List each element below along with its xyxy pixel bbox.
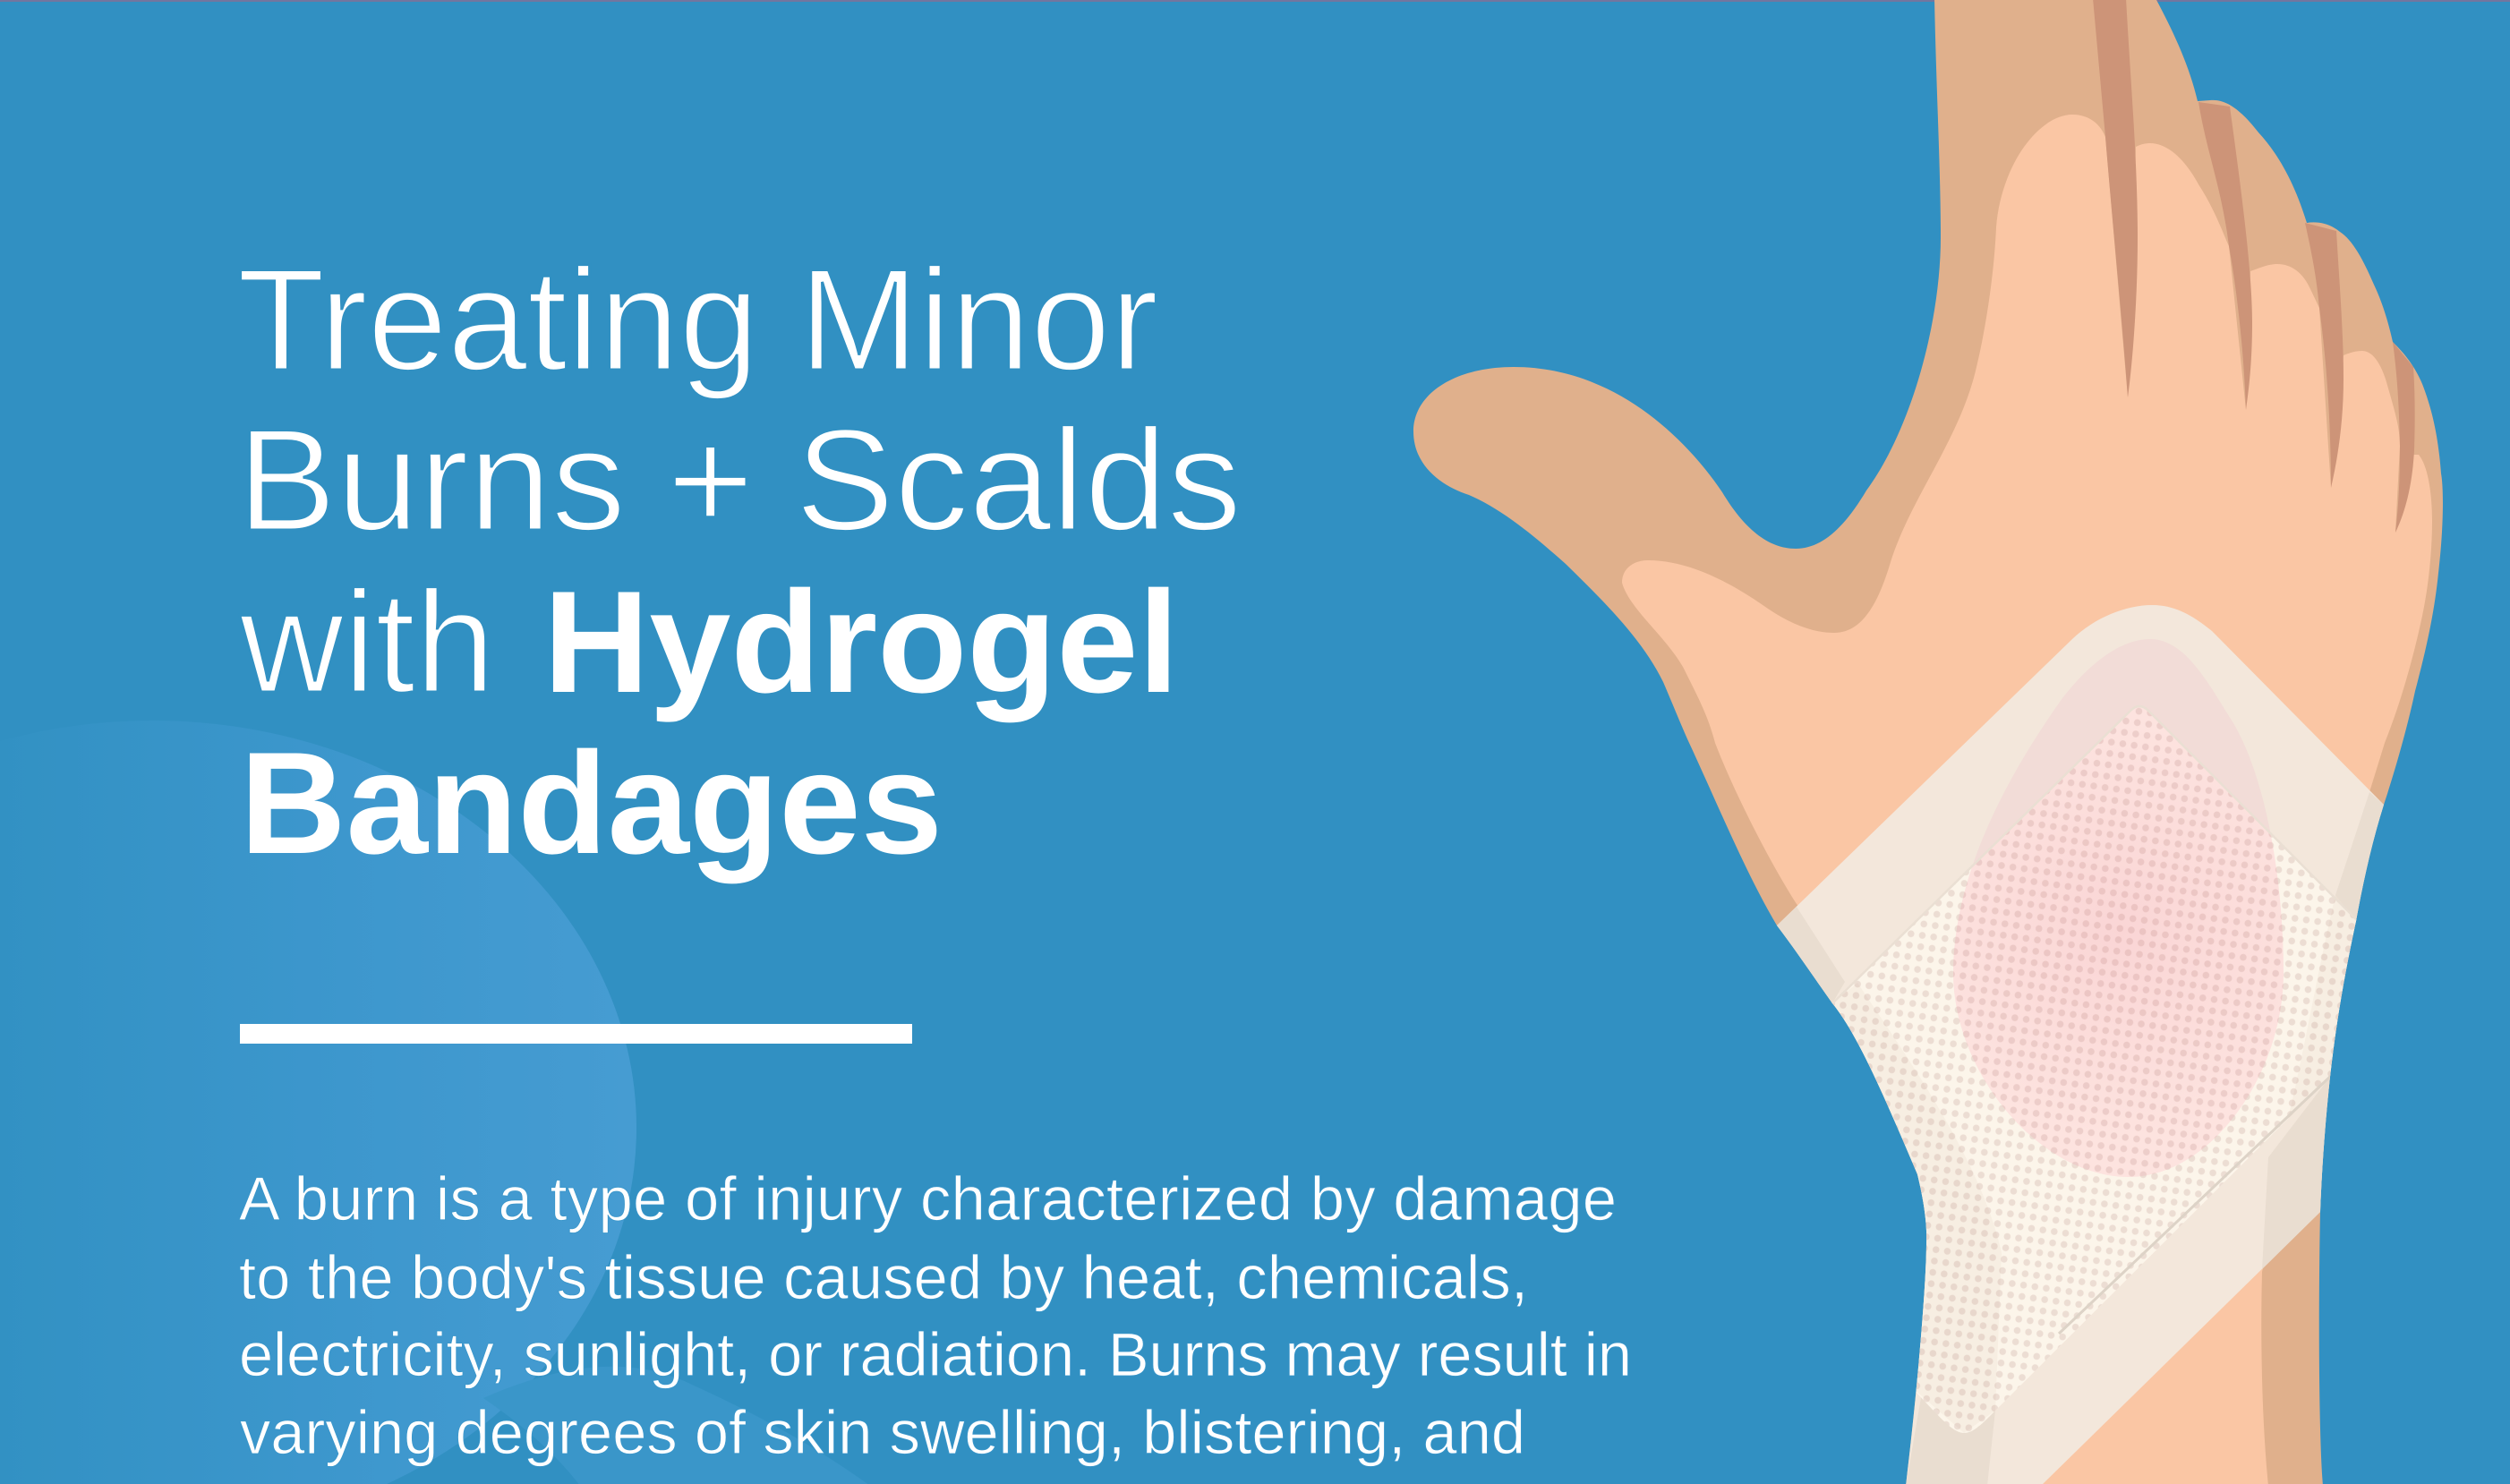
body line 4: varying degrees of skin swelling, blistering, and — [240, 1398, 1525, 1467]
pad dot texture — [1833, 708, 2355, 1431]
tape overlap shading — [1777, 792, 2384, 1484]
bandage — [1777, 605, 2384, 1484]
finger crease 4 — [2393, 342, 2415, 533]
body line 1: A burn is a type of injury characterized by damage — [239, 1164, 1617, 1233]
burn showing through tape — [1973, 639, 2270, 863]
adhesive tape — [1777, 605, 2384, 1484]
title line 3 bold part: Hydrogel — [543, 561, 1179, 723]
finger crease 1 — [2093, 0, 2138, 397]
hand light skin — [1622, 115, 2432, 1484]
title line 4 bold: Bandages — [240, 722, 943, 884]
divider rule — [240, 1024, 912, 1044]
pad top edges — [1826, 706, 2360, 1010]
background blob: lower shape — [483, 1367, 870, 1484]
hand silhouette — [1413, 0, 2443, 1484]
body line 3: electricity, sunlight, or radiation. Burns may result in — [239, 1320, 1632, 1389]
background blob: large circle — [0, 721, 636, 1484]
body line 2: to the body's tissue caused by heat, chemicals, — [239, 1243, 1528, 1312]
gauze pad — [1831, 836, 2356, 1433]
top edge line — [0, 0, 2510, 2]
finger crease 3 — [2305, 223, 2344, 488]
pad lower edge line — [2059, 1075, 2332, 1334]
title line 3 light part: with — [239, 561, 495, 723]
body paragraph — [239, 1164, 1632, 1467]
burn under pad — [1953, 707, 2284, 1177]
finger crease 2 — [2198, 102, 2252, 410]
title line 2: Burns + Scalds — [237, 399, 1242, 561]
title line 1: Treating Minor — [237, 239, 1158, 401]
illustration: bandaged hand — [1413, 0, 2443, 1484]
title — [237, 239, 1242, 884]
pad shading over skin folds — [1832, 895, 2356, 1433]
